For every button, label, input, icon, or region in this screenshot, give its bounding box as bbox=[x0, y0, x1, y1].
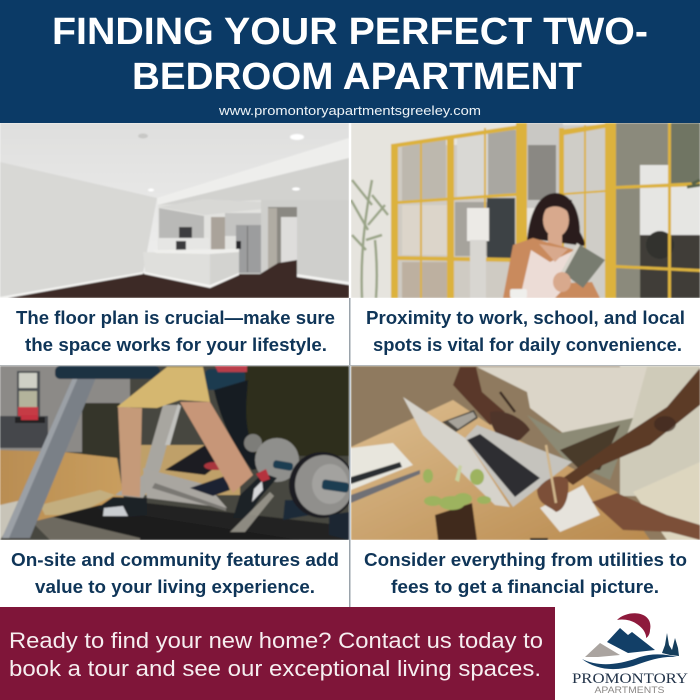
logo: Promontory Apartments bbox=[572, 613, 688, 695]
logo: subtitle: APARTMENTS bbox=[594, 685, 664, 695]
footer call to action: book a tour and see our exceptional living spaces. bbox=[9, 656, 541, 681]
caption: proximity bbox=[366, 308, 685, 355]
caption: proximity: Proximity to work, school, and local bbox=[366, 308, 685, 328]
logo: crescent sun bbox=[617, 613, 650, 638]
footer call to action: Ready to find your new home? Contact us today to bbox=[9, 628, 543, 653]
caption: community features: On-site and community features add bbox=[11, 550, 339, 570]
caption: floor plan: The floor plan is crucial—make sure bbox=[16, 308, 335, 328]
photo: woman with folder by yellow windows bbox=[351, 123, 700, 298]
caption: community features: value to your living experience. bbox=[35, 577, 315, 597]
photo: legs on a treadmill in a gym bbox=[0, 366, 355, 540]
logo: pine trees bbox=[662, 633, 679, 656]
header band bbox=[0, 0, 700, 123]
website url: www.promontoryapartmentsgreeley.com bbox=[218, 103, 481, 118]
logo: navy mountains bbox=[607, 628, 655, 653]
caption: utilities and fees bbox=[364, 550, 687, 597]
logo: grey mountain bbox=[585, 643, 620, 657]
title: FINDING YOUR PERFECT TWO- bbox=[52, 11, 648, 53]
caption: community features bbox=[11, 550, 339, 597]
title bbox=[52, 11, 648, 98]
caption: floor plan bbox=[16, 308, 335, 355]
caption: floor plan: the space works for your lifestyle. bbox=[25, 335, 327, 355]
caption: utilities and fees: Consider everything from utilities to bbox=[364, 550, 687, 570]
logo: swoosh bbox=[582, 654, 677, 669]
title: BEDROOM APARTMENT bbox=[132, 56, 582, 98]
photo: two people reviewing finances at a laptop bbox=[351, 366, 700, 540]
caption: utilities and fees: fees to get a financial picture. bbox=[391, 577, 659, 597]
caption: proximity: spots is vital for daily convenience. bbox=[373, 335, 682, 355]
footer call to action bbox=[0, 607, 555, 700]
photo: empty apartment living room and kitchen bbox=[0, 123, 349, 298]
logo: wordmark: PROMONTORY bbox=[572, 671, 688, 687]
